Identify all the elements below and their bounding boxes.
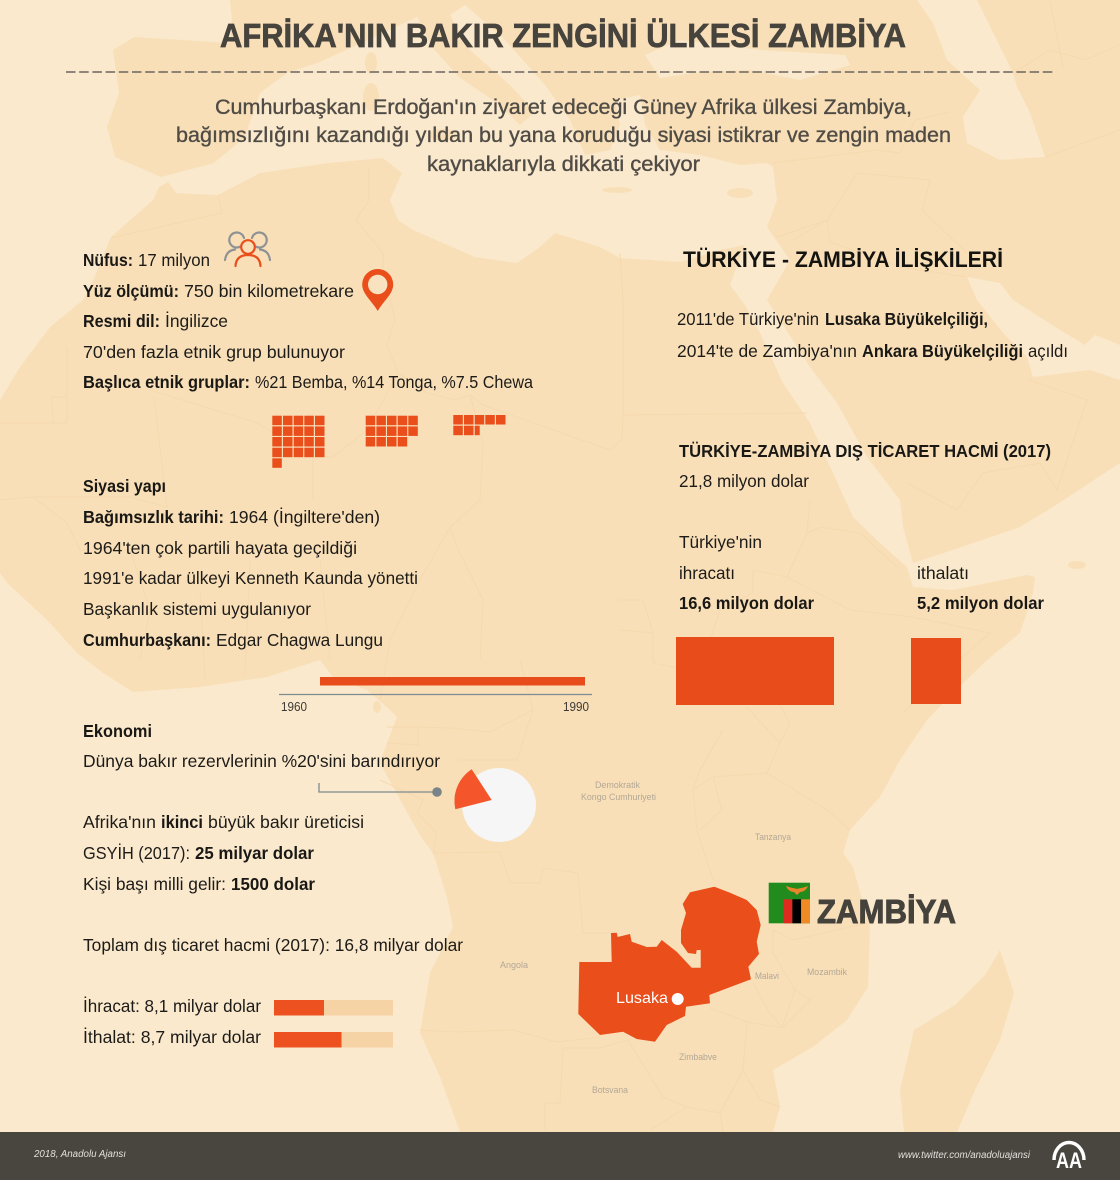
map: region labels: Tanzanya <box>755 832 792 843</box>
icon: Zambia flag <box>769 883 810 923</box>
intro text: Cumhurbaşkanı Erdoğan'ın ziyaret edeceği Güney Afrika ülkesi Zambiya, <box>215 95 912 119</box>
bar: exports <box>676 637 834 705</box>
intro text: kaynaklarıyla dikkati çekiyor <box>427 152 700 176</box>
copper producer: Afrika'nın <box>83 812 156 832</box>
area: 750 bin kilometrekare <box>184 281 354 301</box>
area: Yüz ölçümü: <box>83 281 179 301</box>
copper producer: ikinci <box>161 812 203 832</box>
independence date: Bağımsızlık tarihi: <box>83 507 224 527</box>
waffle chart: Bemba 21 <box>272 416 324 468</box>
callout line <box>319 783 442 797</box>
copper producer <box>83 812 364 832</box>
intro text <box>176 95 951 176</box>
map: region labels: Mozambik <box>807 967 847 978</box>
footer credit: 2018, Anadolu Ajansı <box>33 1149 126 1160</box>
trade volume: 21,8 milyon dolar <box>679 471 809 491</box>
icon: AA logo <box>1054 1142 1084 1173</box>
import label: İthalat: 8,7 milyar dolar <box>83 1027 261 1047</box>
embassy line 1: 2011'de Türkiye'nin <box>677 309 819 329</box>
heading: political structure: Siyasi yapı <box>83 476 166 496</box>
map: region labels: Angola <box>500 960 529 971</box>
GDP: GSYİH (2017): <box>83 843 190 863</box>
timeline chart: 1960 <box>281 699 307 714</box>
footer url: www.twitter.com/anadoluajansi <box>898 1150 1031 1161</box>
heading: economy: Ekonomi <box>83 721 152 741</box>
ethnic count: 70'den fazla etnik grup bulunuyor <box>83 342 345 362</box>
map: Caspian Sea <box>917 0 1045 160</box>
map: Africa land <box>0 158 1035 1132</box>
embassy line 1 <box>677 309 988 329</box>
panel: economy <box>83 721 536 1048</box>
title: AFRİKA'NIN BAKIR ZENGİNİ ÜLKESİ ZAMBİYA <box>220 17 906 54</box>
capital marker <box>672 993 684 1005</box>
area <box>83 281 354 301</box>
independence date: 1964 (İngiltere'den) <box>229 507 380 527</box>
independence date <box>83 507 380 527</box>
timeline chart <box>279 677 592 714</box>
map: islands <box>363 52 1086 713</box>
value: imports: 5,2 milyon dolar <box>917 593 1044 613</box>
map: region labels: Malavi <box>755 971 779 982</box>
embassy line 2: açıldı <box>1028 341 1068 361</box>
import bar <box>274 1032 393 1048</box>
timeline chart: 1990 <box>563 699 589 714</box>
president: Edgar Chagwa Lungu <box>216 630 383 650</box>
export bar <box>274 1000 393 1016</box>
map: Europe and Asia land <box>107 0 1120 563</box>
label: Lusaka: Lusaka <box>616 990 668 1007</box>
map: Madagascar <box>900 950 1014 1132</box>
embassy line 2: 2014'te de Zambiya'nın <box>677 341 857 361</box>
history line 2: 1991'e kadar ülkeyi Kenneth Kaunda yönetti <box>83 568 418 588</box>
GDP: 25 milyar dolar <box>195 843 314 863</box>
language <box>83 311 228 331</box>
label: Turkey: Türkiye'nin <box>679 532 762 552</box>
income per capita <box>83 874 315 894</box>
map: region labels: Zimbabve <box>679 1052 717 1063</box>
bar: imports <box>911 638 961 704</box>
president: Cumhurbaşkanı: <box>83 630 211 650</box>
map: region labels: Demokratik <box>595 780 640 791</box>
language: Resmi dil: <box>83 311 160 331</box>
waffle chart: Chewa 7.5 <box>453 415 506 435</box>
population <box>83 250 210 270</box>
embassy line 2: Ankara Büyükelçiliği <box>862 341 1023 361</box>
export label: İhracat: 8,1 milyar dolar <box>83 996 261 1016</box>
intro text: bağımsızlığını kazandığı yıldan bu yana koruduğu siyasi istikrar ve zengin maden <box>176 123 951 147</box>
map: Zambia <box>578 887 761 1042</box>
language: İngilizce <box>165 311 228 331</box>
total trade: Toplam dış ticaret hacmi (2017): 16,8 milyar dolar <box>83 935 463 955</box>
map: region labels <box>500 780 847 1096</box>
icon: AA logo: AA <box>1056 1148 1082 1173</box>
ethnic groups: Başlıca etnik gruplar: <box>83 372 250 392</box>
population: Nüfus: <box>83 250 133 270</box>
map: Black Sea <box>645 40 850 80</box>
pie chart <box>454 768 536 842</box>
ethnic groups <box>83 372 533 392</box>
value: exports: 16,6 milyon dolar <box>679 593 814 613</box>
icon: people <box>225 232 270 266</box>
icon: location pin <box>362 269 393 311</box>
panel: country facts <box>83 232 533 468</box>
ethnic groups: %21 Bemba, %14 Tonga, %7.5 Chewa <box>255 372 533 392</box>
embassy line 1: Lusaka Büyükelçiliği, <box>825 309 988 329</box>
label: imports: ithalatı <box>917 563 969 583</box>
panel: Turkey-Zambia relations <box>676 247 1068 705</box>
population: 17 milyon <box>138 250 210 270</box>
map: region labels: Kongo Cumhuriyeti <box>581 792 656 803</box>
system: Başkanlık sistemi uygulanıyor <box>83 599 311 619</box>
president <box>83 630 383 650</box>
map: region labels: Botsvana <box>592 1085 629 1096</box>
copper producer: büyük bakır üreticisi <box>208 812 364 832</box>
income per capita: Kişi başı milli gelir: <box>83 874 226 894</box>
heading: relations: TÜRKİYE - ZAMBİYA İLİŞKİLERİ <box>683 247 1003 272</box>
trade heading: TÜRKİYE-ZAMBİYA DIŞ TİCARET HACMİ (2017) <box>679 441 1051 461</box>
copper reserves: Dünya bakır rezervlerinin %20'sini barındırıyor <box>83 751 440 771</box>
label: Zambia: ZAMBİYA <box>817 893 956 930</box>
waffle chart: Tonga 14 <box>366 416 418 446</box>
embassy line 2 <box>677 341 1068 361</box>
footer <box>0 1132 1120 1180</box>
GDP <box>83 843 314 863</box>
history line 1: 1964'ten çok partili hayata geçildiği <box>83 538 357 558</box>
map: Persian Gulf <box>967 277 1120 380</box>
panel: political structure <box>83 476 592 714</box>
income per capita: 1500 dolar <box>231 874 315 894</box>
label: exports: ihracatı <box>679 563 735 583</box>
